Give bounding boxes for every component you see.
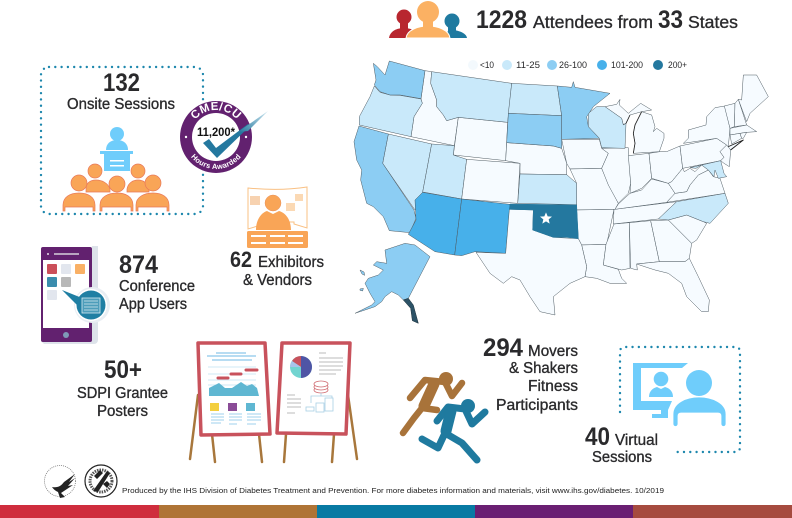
stat: 62 exhibitors and vendors <box>230 247 324 289</box>
stat: 294 movers and shakers: Participants <box>496 397 578 414</box>
heading text: 1228 <box>476 6 527 34</box>
stat: 294 movers and shakers: & Shakers <box>509 360 578 377</box>
icon: exhibitor booth <box>247 187 308 248</box>
heading text: 33 <box>658 6 683 34</box>
stat: 874 conference app users: Conference <box>119 278 195 295</box>
badge: CME/CU hours awarded: Hours Awarded <box>191 154 241 170</box>
stat: 874 conference app users: 874 <box>119 251 158 279</box>
footer colour bar <box>0 505 792 518</box>
icon: two runners <box>403 372 485 460</box>
stat: 874 conference app users <box>119 251 195 313</box>
icon: three people <box>389 1 467 38</box>
dotted border <box>620 347 740 452</box>
heading text <box>476 6 738 34</box>
stat: 62 exhibitors and vendors: 62 <box>230 247 252 272</box>
left poster <box>198 343 270 435</box>
stat: 294 movers and shakers: Movers <box>528 343 578 360</box>
map legend: 26-100 <box>559 60 587 70</box>
Oklahoma, host state with star <box>509 204 578 239</box>
stat: 132 onsite sessions: 132 <box>103 69 140 97</box>
stat: 50+ SDPI grantee posters: 50+ <box>104 356 142 384</box>
stat: 294 movers and shakers <box>483 334 578 414</box>
Texas <box>476 209 587 315</box>
US choropleth map <box>354 61 768 323</box>
icon: check mark <box>203 111 268 158</box>
teal runner <box>422 399 485 460</box>
map legend: 101-200 <box>611 60 643 70</box>
right poster <box>277 343 350 434</box>
heading text: States <box>688 12 738 32</box>
brown runner <box>403 372 462 433</box>
map legend <box>468 60 687 70</box>
stat: 50+ SDPI grantee posters: SDPI Grantee <box>77 385 168 402</box>
stat: 132 onsite sessions <box>67 69 175 113</box>
stat: 294 movers and shakers: 294 <box>483 334 523 362</box>
map legend: 11-25 <box>516 60 540 70</box>
map legend: 200+ <box>668 60 687 70</box>
logo: Indian Health Service seal <box>85 465 117 497</box>
icon: two poster boards <box>190 343 357 462</box>
stat: 132 onsite sessions: Onsite Sessions <box>67 96 175 113</box>
map legend: <10 <box>480 60 494 70</box>
footer credit: Produced by the IHS Division of Diabetes Treatment and Prevention. For more diabetes information and materials, visit www.ihs.gov/diabetes. 10/2019 <box>122 486 664 495</box>
panel: onsite sessions <box>41 67 203 214</box>
stat: 62 exhibitors and vendors: & Vendors <box>243 272 312 289</box>
logo: HHS seal <box>44 466 76 498</box>
title: attendees from states <box>389 1 738 38</box>
icon: monitor and video participant <box>633 363 726 427</box>
stat: 62 exhibitors and vendors: Exhibitors <box>258 254 324 271</box>
icon: phone with app <box>41 246 110 344</box>
dotted border <box>41 67 203 214</box>
stat: 50+ SDPI grantee posters <box>77 356 168 420</box>
icon: presenter and audience <box>63 127 169 211</box>
stat: 40 virtual sessions <box>585 423 658 466</box>
badge: CME/CU hours awarded <box>180 101 268 173</box>
badge: CME/CU hours awarded: 11,200* <box>197 127 236 139</box>
stat: 874 conference app users: App Users <box>119 296 187 313</box>
stat: 40 virtual sessions: Virtual <box>615 432 658 449</box>
stat: 40 virtual sessions: 40 <box>585 423 610 451</box>
panel: conference app users <box>41 246 195 344</box>
stat: 50+ SDPI grantee posters: Posters <box>97 403 148 420</box>
stat: 294 movers and shakers: Fitness <box>528 378 578 395</box>
panel: virtual sessions <box>585 347 740 466</box>
stat: 40 virtual sessions: Sessions <box>592 449 652 466</box>
panel: exhibitors and vendors <box>230 187 324 289</box>
Great Lakes shoreline <box>623 112 743 153</box>
heading text: Attendees from <box>533 12 653 32</box>
badge: CME/CU hours awarded: CME/CU <box>191 102 242 118</box>
